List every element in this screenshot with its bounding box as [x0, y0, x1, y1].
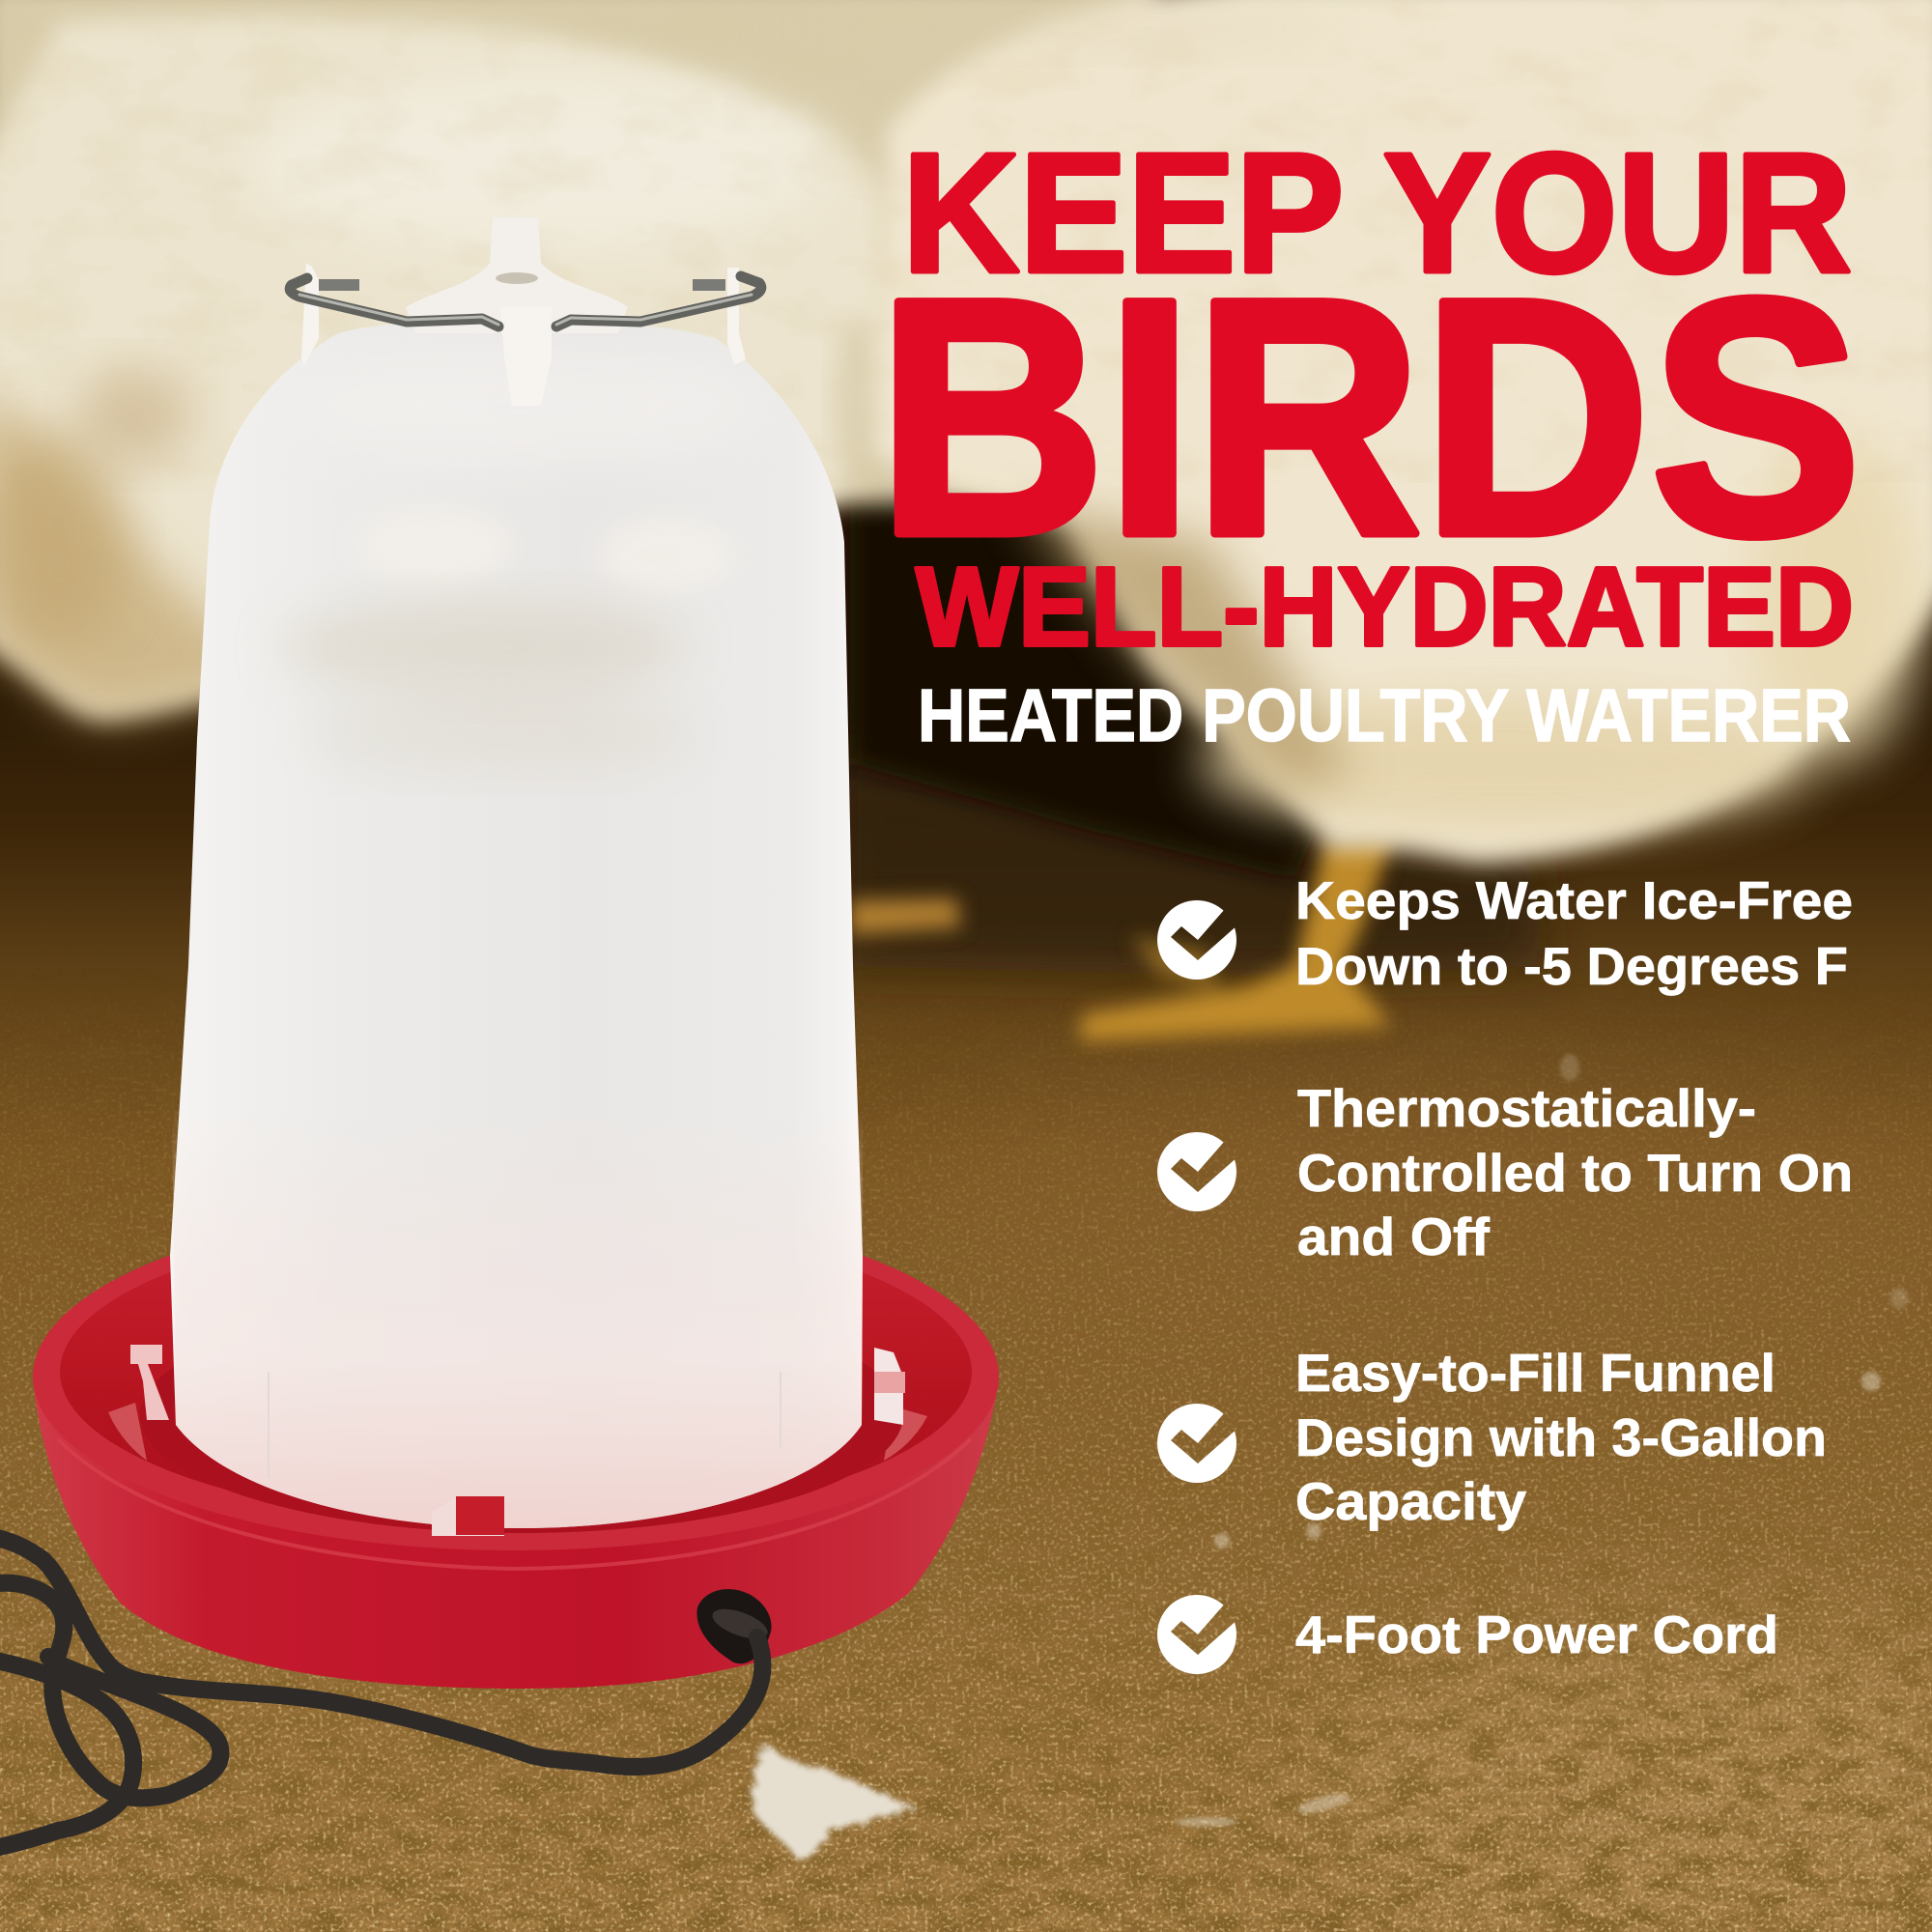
- background: rear chicken: [0, 0, 1159, 502]
- feature 4: [1157, 1595, 1778, 1674]
- feature 1: Down to -5 Degrees F: [1295, 936, 1848, 996]
- feather: [753, 1744, 913, 1862]
- waterer: red base bowl: [33, 1203, 999, 1689]
- title: BIRDS: BIRDS: [877, 229, 1861, 605]
- waterer: power cord strain relief: [696, 1589, 772, 1663]
- power cord: [0, 1536, 763, 1849]
- feature 1: [1157, 870, 1853, 996]
- feature 3: Design with 3-Gallon: [1295, 1407, 1827, 1467]
- background: floor specks: [1176, 1054, 1908, 1827]
- title: [877, 119, 1861, 669]
- feature list: [1157, 870, 1853, 1674]
- background: chicken feet: [849, 829, 1395, 1041]
- waterer: metal wire handle: [290, 276, 761, 327]
- background: right chicken: [773, 0, 1932, 863]
- feature 2: Thermostatically-: [1297, 1078, 1756, 1138]
- background: feather mottling: [0, 0, 1932, 483]
- feature 3: [1157, 1343, 1827, 1531]
- waterer: plastic clips: [301, 263, 746, 406]
- waterer: translucent jug: [170, 320, 863, 1528]
- title: KEEP YOUR: KEEP YOUR: [902, 119, 1852, 308]
- waterer: base tabs: [130, 1345, 905, 1536]
- background: dark shadow under chickens: [831, 502, 1546, 976]
- feature 2: [1157, 1088, 1850, 1256]
- background: left chicken: [0, 17, 887, 720]
- title: WELL-HYDRATED: WELL-HYDRATED: [916, 544, 1854, 669]
- feature 4: 4-Foot Power Cord: [1295, 1605, 1778, 1664]
- feature 3: Easy-to-Fill Funnel: [1295, 1343, 1776, 1403]
- feature 3: Capacity: [1295, 1471, 1526, 1531]
- feature 2: and Off: [1297, 1207, 1491, 1266]
- feature 2: Controlled to Turn On: [1297, 1143, 1853, 1203]
- waterer: lid and filling post: [406, 217, 628, 333]
- feature 1: Keeps Water Ice-Free: [1295, 870, 1853, 930]
- waterer: [33, 217, 999, 1689]
